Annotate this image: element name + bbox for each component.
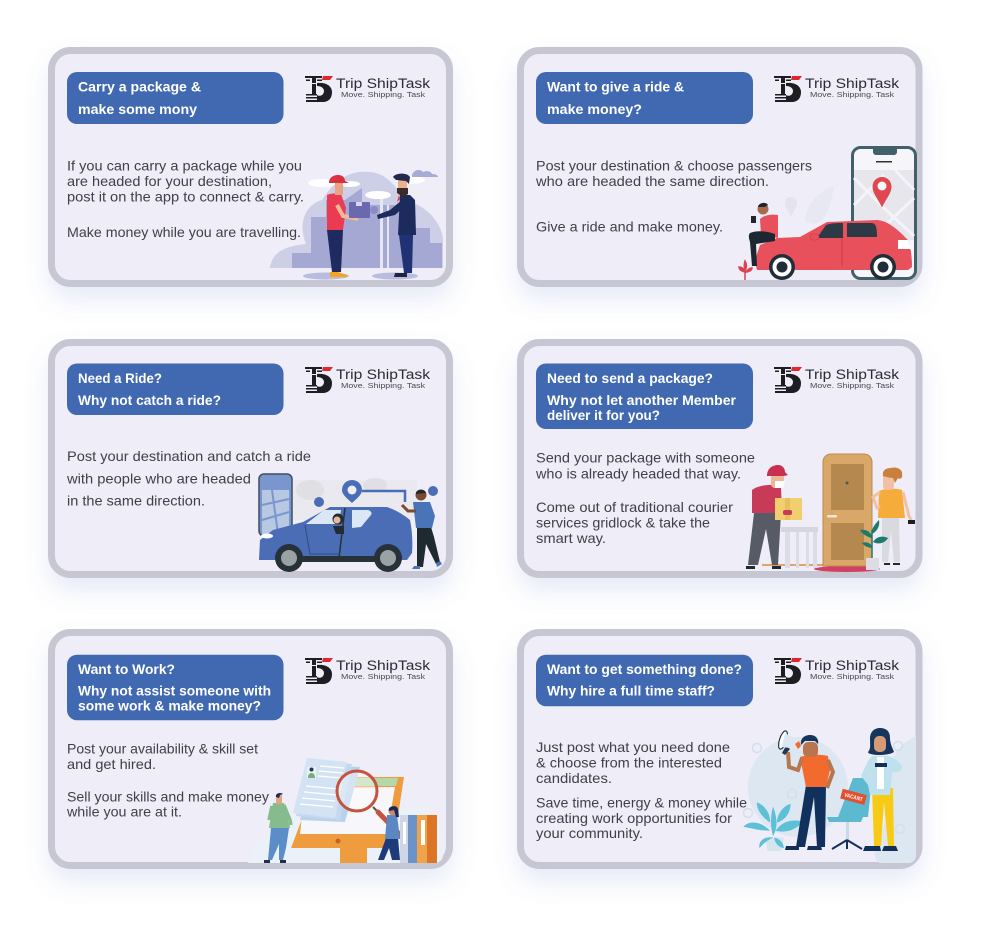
heading: need a ride: Why not catch a ride? — [78, 392, 221, 408]
body text: Save time, energy & money while — [536, 794, 747, 810]
body text: your community. — [536, 825, 643, 841]
logo: Trip ShipTask — [336, 367, 430, 382]
illustration: hiring with vacant chair — [743, 728, 916, 863]
logo: Move. Shipping. Task — [341, 672, 425, 681]
body text — [535, 158, 812, 234]
logo: Move. Shipping. Task — [341, 90, 425, 99]
heading: want to work: Why not assist someone with — [78, 682, 271, 698]
vacant sign — [840, 789, 867, 805]
logo — [774, 76, 899, 102]
body text: If you can carry a package while you — [67, 158, 302, 174]
body text: smart way. — [536, 530, 606, 546]
body text: while you are at it. — [66, 804, 182, 820]
heading: want to work: Want to Work? — [78, 661, 175, 677]
heading: get something done — [536, 655, 753, 706]
heading: give a ride: Want to give a ride & — [547, 78, 684, 94]
body text: post it on the app to connect & carry. — [67, 188, 304, 204]
body text — [67, 158, 304, 240]
body text: Make money while you are travelling. — [67, 224, 301, 240]
body text: and get hired. — [67, 756, 156, 772]
logo: Trip ShipTask — [805, 76, 899, 91]
heading: send a package: Need to send a package? — [547, 370, 713, 386]
body text: who is already headed that way. — [535, 465, 741, 481]
heading: need a ride: Need a Ride? — [78, 370, 162, 386]
body text: candidates. — [536, 770, 612, 786]
panel: want to work — [52, 632, 450, 866]
heading: give a ride — [536, 72, 753, 124]
heading: get something done: Want to get something done? — [547, 661, 742, 677]
body text: Come out of traditional courier — [536, 499, 733, 515]
logo — [774, 658, 899, 684]
vacant sign: VACANT — [843, 792, 864, 803]
body text: Give a ride and make money. — [536, 218, 723, 234]
body text: Post your destination and catch a ride — [67, 448, 311, 464]
logo: Trip ShipTask — [336, 76, 430, 91]
heading: give a ride: make money? — [547, 101, 642, 117]
panel: give a ride — [520, 50, 919, 284]
body text: in the same direction. — [67, 492, 205, 508]
panel: get something done — [520, 632, 919, 866]
logo: Trip ShipTask — [805, 658, 899, 673]
logo — [774, 367, 899, 393]
panel: need a ride — [52, 342, 450, 574]
body text: Send your package with someone — [536, 450, 755, 466]
heading: send a package — [536, 364, 753, 429]
body text — [536, 739, 747, 841]
heading: need a ride — [67, 364, 284, 415]
illustration: resume search on monitor — [248, 758, 443, 863]
body text: Just post what you need done — [536, 739, 730, 755]
heading: carry a package: make some mony — [78, 101, 197, 117]
body text: with people who are headed — [66, 470, 251, 486]
heading: want to work: some work & make money? — [78, 698, 261, 714]
body text: Sell your skills and make money — [67, 789, 269, 805]
body text — [66, 740, 269, 820]
body text — [535, 450, 755, 546]
logo: Move. Shipping. Task — [341, 381, 425, 390]
heading: want to work — [67, 655, 284, 720]
body text: who are headed the same direction. — [535, 173, 769, 189]
logo — [305, 367, 430, 393]
logo: Trip ShipTask — [805, 367, 899, 382]
logo — [305, 76, 430, 102]
logo: Move. Shipping. Task — [810, 381, 894, 390]
body text: are headed for your destination, — [67, 173, 272, 189]
body text: & choose from the interested — [536, 755, 722, 771]
heading: carry a package — [67, 72, 284, 124]
body text — [66, 448, 311, 508]
heading: carry a package: Carry a package & — [78, 78, 201, 94]
heading: send a package: Why not let another Member — [547, 392, 737, 408]
illustration: package handover — [270, 170, 443, 280]
body text: services gridlock & take the — [536, 515, 710, 531]
heading: send a package: deliver it for you? — [547, 407, 660, 423]
body text: Post your availability & skill set — [67, 740, 258, 756]
panel: send a package — [520, 342, 919, 574]
logo — [305, 658, 430, 684]
logo: Move. Shipping. Task — [810, 90, 894, 99]
panel: carry a package — [52, 50, 450, 284]
body text: creating work opportunities for — [536, 810, 732, 826]
illustration: blue car and passenger — [259, 474, 442, 572]
heading: get something done: Why hire a full time staff? — [547, 682, 715, 698]
logo: Move. Shipping. Task — [810, 672, 894, 681]
illustration: doorstep delivery — [746, 454, 915, 572]
body text: Post your destination & choose passengers — [536, 158, 812, 174]
illustration: car, phone and driver — [739, 147, 916, 280]
logo: Trip ShipTask — [336, 658, 430, 673]
